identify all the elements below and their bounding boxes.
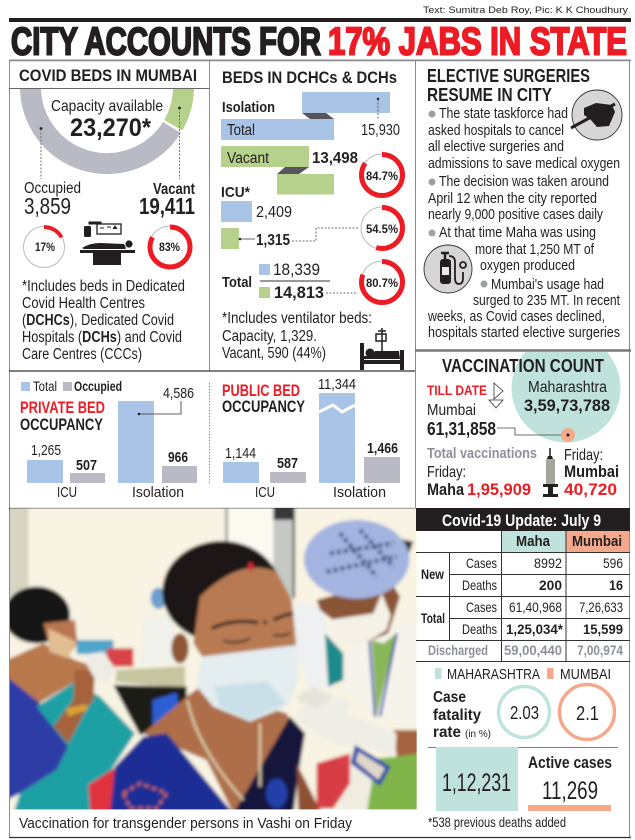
icon: oxygen cylinder bbox=[424, 245, 472, 293]
column headers: Mumbai bbox=[572, 533, 622, 550]
table footnote: *538 previous deaths added bbox=[428, 815, 566, 830]
active cases: Mumbai: 11,269 bbox=[542, 777, 598, 805]
legend: Maharashtra and Mumbai bbox=[435, 667, 611, 683]
bar chart: public: Isolation bbox=[333, 484, 386, 501]
label: till date: TILL DATE bbox=[427, 382, 487, 398]
footnote: ventilator beds: Vacant, 590 (44%) bbox=[222, 345, 326, 362]
row group: new: 16 bbox=[609, 577, 623, 593]
vacant number: 19,411 bbox=[139, 193, 195, 219]
title bbox=[11, 20, 627, 64]
photo: vaccination of transgender persons in Vashi bbox=[3, 505, 420, 813]
footnote: bed definitions bbox=[22, 278, 185, 363]
icon: syringe bbox=[543, 448, 558, 497]
Maharashtra figure: 3,59,73,788 bbox=[524, 397, 610, 415]
ring: 84.7% bbox=[361, 154, 403, 196]
table header bbox=[416, 508, 630, 531]
heading: elective surgeries: ELECTIVE SURGERIES bbox=[427, 66, 590, 86]
row group: new: 200 bbox=[539, 577, 562, 593]
heading: public bed occupancy: PUBLIC BED bbox=[222, 381, 300, 400]
bar chart: private bbox=[27, 385, 197, 501]
isolation bars bbox=[221, 92, 400, 194]
active cases: Maharashtra bbox=[436, 747, 518, 811]
isolation bars: Isolation bbox=[222, 99, 275, 116]
case fatality rate label: rate bbox=[433, 724, 461, 741]
row: discharged: 7,00,974 bbox=[577, 642, 623, 658]
text: surgery details: Mumbai's usage had bbox=[491, 276, 604, 293]
legend: total and occupied bbox=[21, 379, 122, 394]
bar chart: public: 1,466 bbox=[367, 440, 398, 457]
bar chart: public: 11,344 bbox=[318, 376, 356, 393]
vacant label: Vacant bbox=[153, 181, 195, 198]
text: surgery details: April 12 when the city reported bbox=[428, 190, 597, 207]
legend: total and occupied: Total bbox=[33, 379, 57, 394]
occupied label: Occupied bbox=[24, 180, 81, 197]
credit line: Text: Sumitra Deb Roy, Pic: K K Choudhury bbox=[423, 5, 628, 16]
footnote: ventilator beds: Capacity, 1,329. bbox=[222, 328, 317, 345]
total row bbox=[222, 260, 358, 302]
text: surgery details: more that 1,250 MT of bbox=[475, 241, 595, 258]
footnote: bed definitions: Hospitals (DCHs) and Covid bbox=[22, 329, 182, 346]
capacity label: Capacity available bbox=[51, 98, 163, 115]
bubble: Maharashtra total bbox=[512, 352, 620, 442]
ring: Maharashtra fatality: 2.03 bbox=[510, 703, 539, 723]
Friday vaccinations, Mumbai: Friday: bbox=[564, 447, 603, 464]
row group: new: 8992 bbox=[534, 555, 562, 571]
top rule bbox=[9, 18, 631, 22]
panel: beds in DCHCs and DCHs bbox=[221, 68, 404, 370]
row group: new: Cases bbox=[466, 555, 497, 571]
text: surgery details: The state taskforce had bbox=[439, 105, 568, 122]
footnote: bed definitions: Care Centres (CCCs) bbox=[22, 346, 142, 363]
panel: vaccination count bbox=[427, 352, 620, 498]
row group: total bbox=[421, 599, 623, 637]
Mumbai figure bbox=[427, 402, 496, 439]
bar chart: private: 966 bbox=[168, 449, 188, 466]
bar chart: public: 587 bbox=[277, 455, 298, 472]
isolation bars: Vacant bbox=[227, 150, 270, 167]
legend: Maharashtra and Mumbai: MAHARASHTRA bbox=[447, 667, 540, 683]
donut chart: capacity bbox=[30, 87, 184, 164]
ring: Mumbai fatality bbox=[560, 684, 614, 740]
Friday vaccinations, Maharashtra: Maha bbox=[427, 480, 464, 499]
heading: vaccination count: VACCINATION COUNT bbox=[442, 356, 604, 376]
ring: Maharashtra fatality bbox=[498, 686, 550, 738]
Mumbai figure: Mumbai bbox=[427, 402, 476, 419]
text: surgery details bbox=[427, 105, 621, 341]
ring: 83% bbox=[149, 226, 191, 268]
occupied number: 3,859 bbox=[24, 193, 71, 219]
ring: 54.5%: 54.5% bbox=[366, 222, 398, 236]
legend: Maharashtra and Mumbai: MUMBAI bbox=[560, 667, 611, 683]
row group: total: Deaths bbox=[462, 621, 497, 637]
bar chart: public: ICU bbox=[255, 484, 275, 501]
bar chart: public: 1,144 bbox=[225, 445, 256, 462]
photo caption: Vaccination for transgender persons in Vashi on Friday bbox=[19, 815, 352, 832]
ring: 17%: 17% bbox=[35, 242, 55, 254]
isolation bars: 13,498 bbox=[312, 150, 358, 167]
case fatality rate label bbox=[433, 689, 491, 741]
table header: Covid-19 Update: July 9 bbox=[442, 512, 601, 530]
text: surgery details: all elective surgeries and bbox=[428, 138, 564, 155]
total row: Total bbox=[222, 274, 252, 291]
total row: 18,339 bbox=[273, 260, 320, 279]
footnote: bed definitions: *Includes beds in Dedicated bbox=[22, 278, 185, 295]
ring: 17% bbox=[24, 226, 64, 268]
Mumbai figure: 61,31,858 bbox=[427, 419, 496, 439]
isolation bars: 15,930 bbox=[361, 122, 400, 139]
ring: 54.5% bbox=[361, 207, 403, 249]
ring: 80.7%: 80.7% bbox=[366, 276, 398, 290]
legend: total and occupied: Occupied bbox=[74, 379, 122, 394]
Friday vaccinations, Maharashtra: 1,95,909 bbox=[467, 480, 531, 499]
donut leader lines bbox=[40, 107, 181, 179]
case fatality rate label: Case bbox=[433, 689, 466, 706]
heading: DCHCs: BEDS IN DCHCs & DCHs bbox=[222, 68, 397, 87]
icon: hospital bed bbox=[360, 328, 404, 370]
active cases: Mumbai bbox=[528, 754, 612, 811]
heading: private bed occupancy bbox=[20, 398, 105, 434]
bar chart: private: 4,586 bbox=[163, 385, 194, 402]
column headers bbox=[501, 531, 629, 552]
ICU bars bbox=[221, 184, 358, 249]
footnote: ventilator beds: *Includes ventilator beds: bbox=[222, 310, 372, 327]
text: surgery details: At that time Maha was using bbox=[439, 224, 596, 241]
panel: covid beds in Mumbai bbox=[19, 66, 197, 363]
active cases: Maharashtra: 1,12,231 bbox=[442, 769, 511, 797]
heading: public bed occupancy bbox=[222, 381, 305, 416]
row group: total: 61,40,968 bbox=[509, 599, 562, 615]
bar chart: private: 507 bbox=[76, 457, 97, 474]
row group: total: Cases bbox=[466, 599, 497, 615]
row: discharged: 59,00,440 bbox=[504, 642, 562, 658]
footnote: bed definitions: (DCHCs), Dedicated Covid bbox=[22, 312, 174, 329]
bar chart: private: Isolation bbox=[132, 484, 184, 501]
text: surgery details: oxygen produced bbox=[480, 257, 575, 274]
row group: new: New bbox=[421, 566, 444, 582]
row group: total: 15,599 bbox=[583, 621, 623, 637]
ring: 83%: 83% bbox=[159, 242, 180, 254]
panel: private and public bed occupancy bbox=[20, 376, 400, 501]
icon: outline arrows bbox=[489, 383, 503, 408]
row group: total: 1,25,034* bbox=[506, 621, 564, 637]
Maharashtra figure bbox=[524, 379, 610, 415]
Friday vaccinations, Mumbai: Mumbai bbox=[564, 462, 619, 481]
capacity number: 23,270* bbox=[70, 114, 151, 142]
case fatality rate label: (in %) bbox=[465, 729, 491, 740]
active cases: Mumbai: Active cases bbox=[528, 754, 612, 772]
heading: covid beds: COVID BEDS IN MUMBAI bbox=[19, 66, 197, 85]
ICU bars: 2,409 bbox=[256, 204, 292, 221]
ICU bars: ICU* bbox=[221, 184, 250, 201]
total row: 14,813 bbox=[274, 283, 324, 302]
ICU bars: 1,315 bbox=[256, 232, 290, 249]
bubble: Mumbai with leader bbox=[497, 428, 575, 442]
row group: new: 596 bbox=[603, 555, 623, 571]
row group: total: Total bbox=[421, 610, 445, 626]
heading: elective surgeries bbox=[427, 66, 590, 105]
heading: private bed occupancy: OCCUPANCY bbox=[20, 415, 103, 434]
Friday vaccinations, Mumbai: 40,720 bbox=[564, 480, 617, 499]
bar chart: private: 1,265 bbox=[31, 442, 61, 459]
row group: new bbox=[421, 555, 623, 593]
text: surgery details: asked hospitals to cancel bbox=[428, 122, 564, 139]
ring: 84.7%: 84.7% bbox=[366, 169, 398, 183]
row group: total: 7,26,633 bbox=[579, 599, 623, 615]
Friday vaccinations, Maharashtra: Friday: bbox=[427, 464, 466, 481]
panel: elective surgeries bbox=[424, 66, 622, 341]
heading: private bed occupancy: PRIVATE BED bbox=[20, 398, 105, 417]
bar chart: private: ICU bbox=[57, 484, 77, 501]
Friday vaccinations, Mumbai bbox=[564, 447, 619, 499]
footnote: ventilator beds bbox=[222, 310, 372, 362]
heading: public bed occupancy: OCCUPANCY bbox=[222, 397, 305, 416]
title: CITY ACCOUNTS FOR bbox=[11, 20, 321, 64]
footnote: bed definitions: Covid Health Centres bbox=[22, 295, 145, 312]
icon: patient on monitored bed bbox=[80, 222, 135, 265]
ring: Mumbai fatality: 2.1 bbox=[576, 703, 599, 725]
bar chart: public bbox=[223, 376, 400, 501]
panel: Covid-19 update table bbox=[416, 508, 630, 662]
icon: gloved hand with scalpel bbox=[571, 90, 622, 140]
ring: 80.7% bbox=[361, 261, 403, 303]
Friday vaccinations, Maharashtra bbox=[427, 446, 537, 499]
row: discharged: Discharged bbox=[428, 642, 488, 658]
Maharashtra figure: Maharashtra bbox=[528, 379, 607, 396]
row group: new: Deaths bbox=[462, 577, 497, 593]
column headers: Maha bbox=[516, 533, 551, 550]
Friday vaccinations, Maharashtra: Total vaccinations bbox=[427, 446, 537, 462]
case fatality rate label: fatality bbox=[433, 707, 481, 724]
isolation bars: Total bbox=[227, 122, 255, 139]
row: discharged bbox=[428, 642, 623, 658]
heading: elective surgeries: RESUME IN CITY bbox=[427, 85, 552, 105]
